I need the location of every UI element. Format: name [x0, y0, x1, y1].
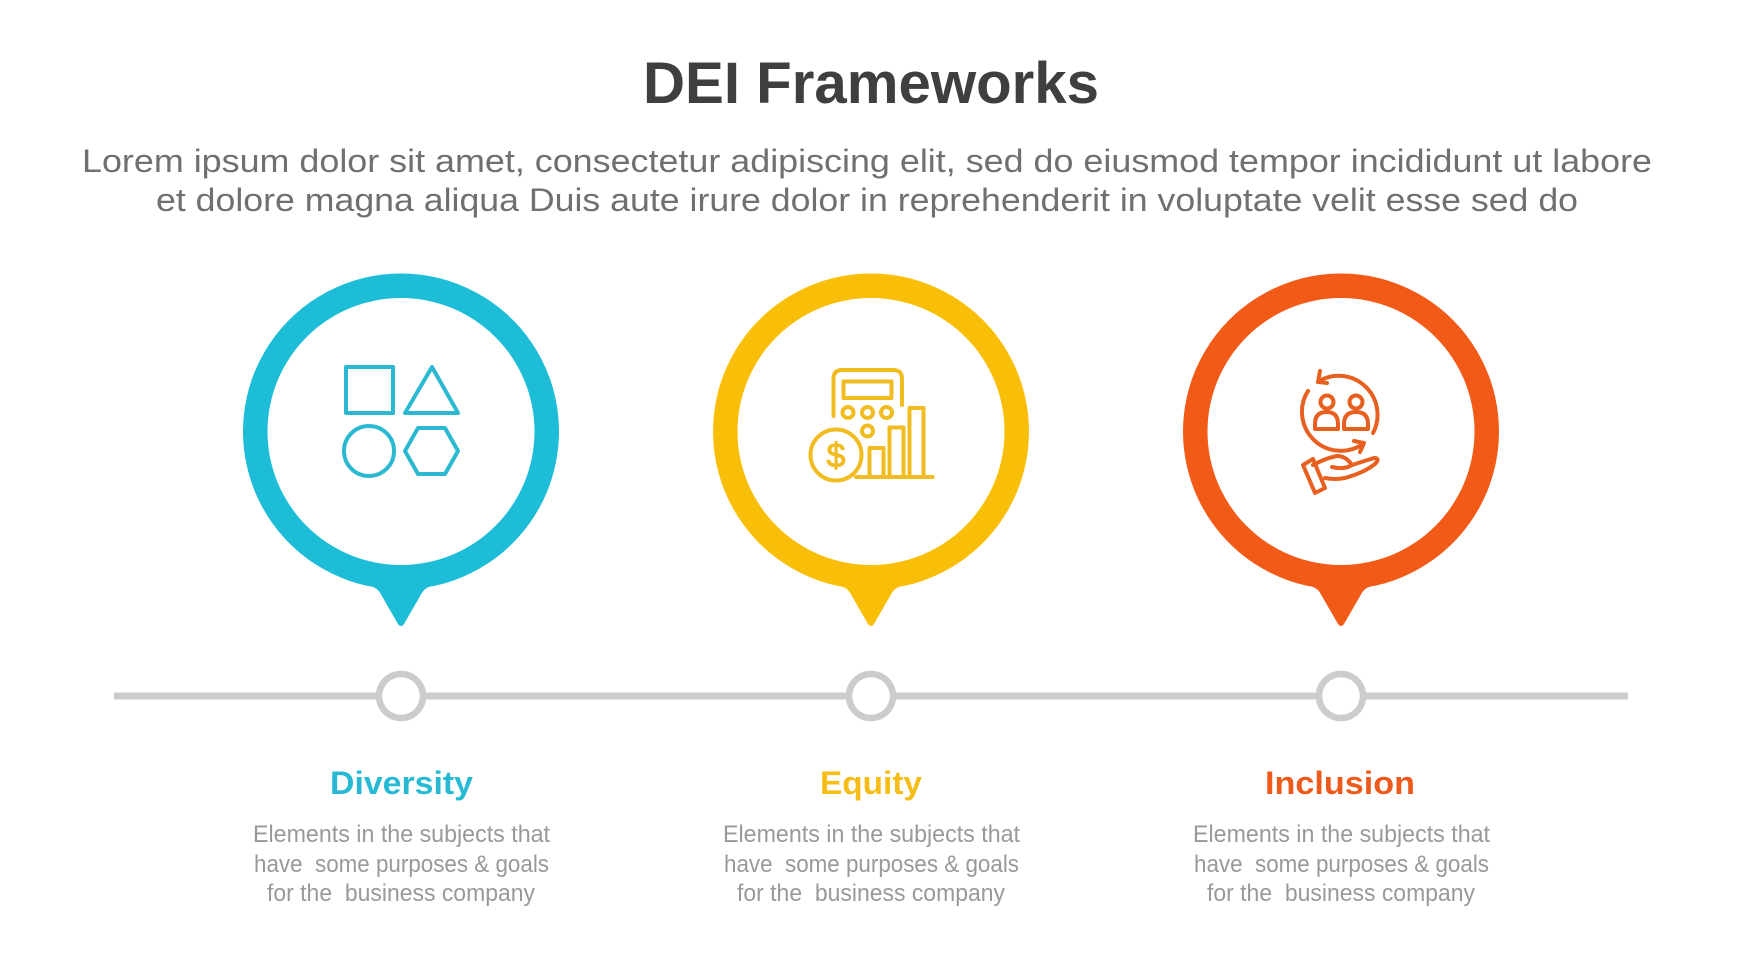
subtitle text block: et dolore magna aliqua Duis aute irure dolor in reprehenderit in voluptate velit esse sed do [156, 182, 1578, 218]
icon: calculator and chart [810, 370, 932, 480]
pin: inclusion [1183, 273, 1499, 626]
timeline node: equity [849, 674, 893, 718]
description: equity: Elements in the subjects that [723, 821, 1020, 848]
description: diversity: for the business company [267, 880, 536, 907]
timeline node: inclusion [1319, 674, 1363, 718]
timeline node: diversity [379, 674, 423, 718]
panel: diversity [243, 273, 559, 907]
description: diversity: have some purposes & goals [254, 851, 549, 878]
heading: inclusion: Inclusion [1265, 765, 1415, 801]
description: equity [723, 821, 1020, 907]
heading: equity: Equity [820, 765, 922, 801]
panel: equity [713, 273, 1029, 907]
description: inclusion: have some purposes & goals [1194, 851, 1489, 878]
description: diversity [253, 821, 550, 907]
title: DEI Frameworks [643, 51, 1099, 116]
icon: people cycle in hand [1302, 371, 1378, 493]
subtitle text block: Lorem ipsum dolor sit amet, consectetur adipiscing elit, sed do eiusmod tempor incididunt ut labore [82, 143, 1652, 179]
description: inclusion [1193, 821, 1490, 907]
icon: shapes [344, 367, 458, 476]
description: equity: for the business company [737, 880, 1006, 907]
pin: diversity [243, 273, 559, 626]
timeline [114, 674, 1628, 718]
panel: inclusion [1183, 273, 1499, 907]
description: inclusion: Elements in the subjects that [1193, 821, 1490, 848]
heading: diversity: Diversity [330, 765, 473, 801]
description: equity: have some purposes & goals [724, 851, 1019, 878]
description: diversity: Elements in the subjects that [253, 821, 550, 848]
icon glyph: dollar sign: $ [827, 437, 846, 475]
pin: equity [713, 273, 1029, 626]
subtitle text block [82, 143, 1652, 218]
description: inclusion: for the business company [1207, 880, 1476, 907]
